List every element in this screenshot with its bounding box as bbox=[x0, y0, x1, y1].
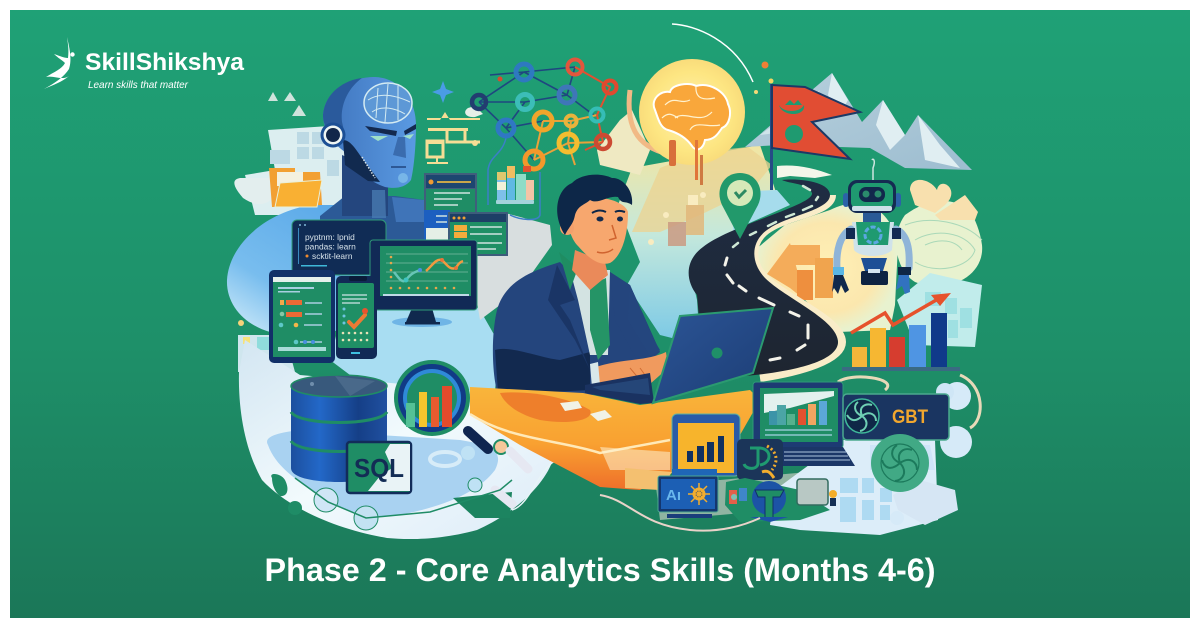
icon: winding road bbox=[689, 180, 842, 378]
icon: flowchart bbox=[427, 112, 480, 164]
brain circuit bbox=[364, 83, 412, 123]
icon: small robot bbox=[832, 159, 911, 294]
panel: orange desk bbox=[470, 387, 760, 490]
head shape bbox=[323, 77, 416, 188]
icon: green swirl circle bbox=[871, 434, 929, 492]
ear ring bbox=[320, 122, 346, 148]
shirt bbox=[570, 270, 610, 355]
dark head back bbox=[323, 78, 362, 136]
chart: magnifying glass bbox=[394, 360, 488, 449]
chart: yellow circle with brain bbox=[629, 24, 768, 185]
icon: business person bbox=[493, 175, 668, 395]
logo: SkillShikshya bbox=[44, 37, 244, 91]
chart: rising bars with arrow bbox=[838, 293, 980, 428]
code text: pandas: learn bbox=[305, 242, 356, 252]
panel: lower-left swoosh bbox=[239, 340, 555, 539]
icon: Nepal flag bbox=[768, 78, 860, 190]
chart: mountains bbox=[745, 73, 972, 170]
icon: folder bbox=[269, 168, 322, 207]
icon: blue AI head bbox=[320, 77, 426, 262]
panel: GBT badge: GBT bbox=[892, 407, 928, 428]
icon: AI monitor: Aı bbox=[666, 487, 681, 504]
neck bbox=[342, 155, 388, 216]
icon: yellow bar tablet bbox=[672, 414, 740, 476]
icon: tablet bbox=[269, 270, 335, 363]
icon: database bbox=[291, 375, 387, 482]
chart: network graph bbox=[472, 60, 616, 220]
jaw mechanism bbox=[343, 140, 380, 182]
panel: app windows bbox=[424, 173, 508, 256]
arm and hands bbox=[610, 272, 660, 362]
eyes and brows bbox=[592, 211, 625, 213]
title: Phase 2 - Core Analytics Skills (Months 4-6) bbox=[264, 552, 936, 588]
chart: desktop monitor with line chart bbox=[370, 240, 477, 327]
chart: small bar glass bbox=[496, 166, 534, 204]
panel: light blue area lower right bbox=[655, 382, 972, 535]
icons: triangles and star bbox=[268, 81, 483, 117]
icon: map pin bbox=[719, 173, 761, 239]
panel: center-right glow and map bbox=[597, 110, 982, 347]
road markings bbox=[733, 186, 818, 247]
swoosh: pink curve bbox=[600, 495, 760, 531]
panel: GBT badge bbox=[843, 394, 949, 440]
icon: laptop with chart bbox=[753, 382, 855, 466]
icon: AI monitor bbox=[658, 469, 718, 518]
icons: small tools row bbox=[725, 478, 837, 522]
icon: leaping figure bbox=[44, 37, 70, 89]
shoulders bbox=[320, 196, 426, 262]
icon: P logo tile bbox=[737, 439, 783, 480]
icon: laptop bbox=[585, 308, 773, 404]
code text: scktit-learn bbox=[312, 251, 353, 261]
code text: pyptnm: lpnid bbox=[305, 232, 355, 242]
jacket bbox=[493, 262, 660, 395]
eyes and brows bbox=[365, 124, 416, 136]
text: brand name: SkillShikshya bbox=[85, 49, 244, 76]
text: tagline: Learn skills that matter bbox=[88, 79, 188, 91]
neck bbox=[572, 250, 608, 290]
icon: phone bbox=[336, 276, 377, 359]
icon: SQL badge: SQL bbox=[354, 453, 404, 483]
icon: SQL badge bbox=[347, 442, 411, 493]
head bbox=[567, 197, 628, 264]
panel: code screen bbox=[292, 220, 386, 275]
panel: left soft background shapes bbox=[227, 125, 552, 390]
hair bbox=[557, 175, 632, 235]
